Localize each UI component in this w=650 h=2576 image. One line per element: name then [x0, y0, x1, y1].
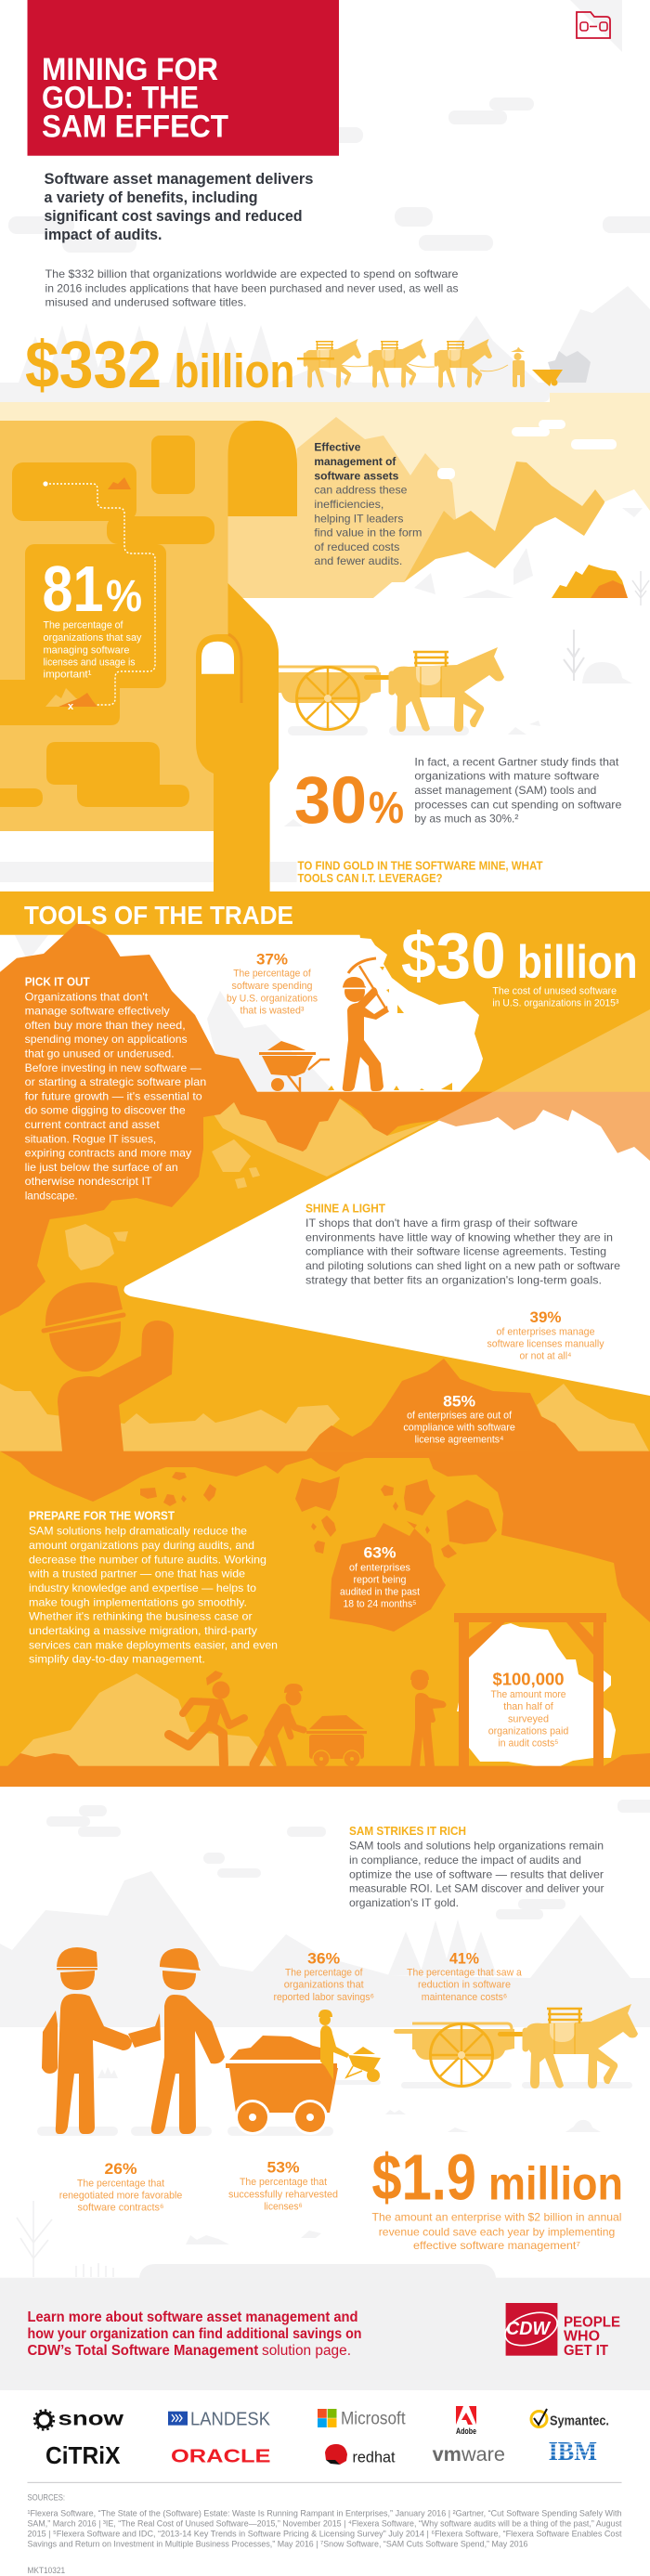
logo: Adobe — [456, 2406, 476, 2436]
text: Gartner study: by as much as 30%.² — [414, 813, 518, 826]
logo: Microsoft — [318, 2409, 406, 2429]
text: SAM strikes it rich: SAM tools and solutions help organizations remain — [349, 1840, 604, 1853]
text: pick it out: often buy more than they need, — [25, 1019, 186, 1032]
icon: standing miner — [410, 1670, 446, 1766]
$332 billion figure: billion — [175, 345, 295, 397]
title block: GOLD: THE — [42, 81, 199, 116]
mine floor — [0, 1766, 650, 1787]
intro heading: significant cost savings and reduced — [45, 207, 303, 225]
stat: 30%: % — [369, 784, 404, 833]
stat: 63%: report being — [353, 1574, 407, 1585]
text: effective management: can address these — [314, 484, 408, 497]
stat: 37%: that is wasted³ — [240, 1005, 305, 1016]
logo: Citrix: CiTRiX — [46, 2441, 121, 2469]
stat: $1.9 million — [371, 2140, 623, 2252]
icon: mine cart full of gold — [226, 2036, 338, 2135]
logo: CDW: CDW — [506, 2319, 552, 2339]
stat: $100,000: in audit costs⁵ — [498, 1738, 559, 1750]
stat: 81%: licenses and usage is — [43, 657, 136, 668]
intro paragraph: misused and underused software titles. — [45, 295, 247, 308]
icon: mule and cart, right — [394, 2004, 638, 2088]
text: prepare for the worst: services can make deployments easier, and even — [29, 1638, 278, 1651]
text: pick it out: spending money on applications — [25, 1033, 188, 1046]
stat: 37%: software spending — [232, 981, 312, 992]
stat: 85%: 85% — [443, 1392, 475, 1410]
stat: 53%: successfully reharvested — [228, 2189, 338, 2200]
icon: mule train — [297, 339, 525, 388]
intro heading: Software asset management delivers — [45, 170, 314, 188]
stat: $100,000: $100,000 — [492, 1670, 565, 1688]
icon: large miner — [44, 1282, 174, 1451]
stat: 63%: 63% — [364, 1543, 396, 1561]
stat: $30 billion — [401, 919, 638, 1009]
stat: 37%: by U.S. organizations — [227, 993, 318, 1004]
stat: 81%: important¹ — [43, 669, 92, 680]
text: prepare for the worst: decrease the number of future audits. Working — [29, 1553, 266, 1566]
question heading — [297, 860, 543, 885]
intro heading — [45, 170, 314, 243]
icon: wheelbarrow of ore — [259, 1041, 330, 1091]
text: prepare for the worst: SAM solutions help dramatically reduce the — [29, 1525, 247, 1538]
stat: 81%: managing software — [43, 644, 130, 656]
icon: small miner with wheelbarrow — [318, 2010, 381, 2082]
sources: SOURCES: — [28, 2493, 65, 2504]
logo: VMware: vmware — [433, 2444, 505, 2465]
text: pick it out: for future growth — it's essential to — [25, 1089, 202, 1102]
text: effective management: management of — [314, 455, 396, 468]
stat: 81% — [43, 553, 142, 680]
stat: $30 billion: in U.S. organizations in 2015³ — [492, 998, 619, 1009]
text: prepare for the worst: amount organizations pay during audits, and — [29, 1539, 254, 1552]
heading: tools of the trade: TOOLS OF THE TRADE — [24, 901, 293, 930]
logo: Red Hat: redhat — [353, 2449, 396, 2466]
text: effective management: find value in the form — [314, 527, 422, 540]
text: prepare for the worst: Whether it's rethinking the business case or — [29, 1610, 253, 1623]
panel: gold mine map — [0, 421, 297, 893]
text: Gartner study — [414, 755, 622, 826]
intro heading: a variety of benefits, including — [45, 189, 258, 206]
stat: 26%: 26% — [104, 2160, 137, 2178]
stat: 26%: software contracts⁶ — [78, 2203, 163, 2214]
icon: running miner — [169, 1671, 244, 1764]
title block — [28, 0, 339, 156]
text: Gartner study: asset management (SAM) tools and — [414, 784, 596, 797]
stat: $1.9 million: revenue could save each year by implementing — [379, 2225, 615, 2238]
text: prepare for the worst — [28, 1509, 278, 1666]
logo: Oracle: ORACLE — [171, 2447, 271, 2467]
text: Gartner study: In fact, a recent Gartner study finds that — [414, 755, 619, 768]
text: pick it out: that go unused or underused. — [25, 1047, 175, 1060]
stat: 36%: reported labor savings⁶ — [273, 1992, 374, 2003]
stat: 85%: of enterprises are out of — [407, 1411, 513, 1422]
text: pick it out: Organizations that don't — [25, 990, 149, 1003]
stat: 63%: of enterprises — [349, 1562, 410, 1573]
text: shine a light: environments have little way of knowing whether they are in — [306, 1230, 613, 1243]
stat: $100,000: surveyed — [508, 1713, 549, 1724]
stat: $100,000 — [488, 1670, 568, 1750]
stat: 39%: 39% — [529, 1308, 561, 1326]
text: pick it out: current contract and asset — [25, 1118, 160, 1131]
sources: ¹Flexera Software, “The State of the (Software) Estate: Waste Is Running Rampant in Enterprises,” January 2016 | ²Gartner, “Cut Software Spending Safely With — [28, 2508, 622, 2518]
logo: IBM: IBM — [549, 2437, 597, 2466]
text: Gartner study: organizations with mature software — [414, 770, 600, 783]
stat: 85%: license agreements⁴ — [415, 1435, 504, 1446]
question heading: TO FIND GOLD IN THE SOFTWARE MINE, WHAT — [297, 860, 543, 873]
gray band right of shaft — [270, 862, 297, 882]
stat: 85%: compliance with software — [403, 1423, 515, 1434]
text: effective management: and fewer audits. — [314, 554, 402, 567]
stat: 63%: 18 to 24 months⁵ — [344, 1598, 416, 1609]
text: shine a light: compliance with their software license agreements. Testing — [306, 1245, 606, 1258]
stat: 41%: 41% — [449, 1949, 479, 1967]
stat: $1.9 million: The amount an enterprise with $2 billion in annual — [371, 2211, 622, 2224]
text: SAM strikes it rich: measurable ROI. Let SAM discover and deliver your — [349, 1882, 604, 1895]
stat: 63%: audited in the past — [340, 1586, 420, 1597]
text: effective management: helping IT leaders — [314, 512, 403, 525]
intro paragraph: The $332 billion that organizations worldwide are expected to spend on software — [45, 267, 459, 280]
sources — [28, 2493, 622, 2575]
text: Gartner study: processes can cut spending on software — [414, 798, 622, 811]
stat: 36%: The percentage of — [285, 1968, 363, 1979]
panel: footer call to action: CDW’s Total Software Management — [28, 2343, 258, 2359]
text: shine a light — [306, 1202, 620, 1286]
stat: 81%: organizations that say — [43, 632, 142, 644]
text: prepare for the worst: undertaking a massive migration, third-party — [29, 1624, 257, 1637]
mine shaft — [196, 583, 279, 893]
logo: CDW: GET IT — [564, 2343, 608, 2359]
stat: 37% — [227, 950, 318, 1016]
text: shine a light: strategy that better fits an organization's long-term goals. — [306, 1273, 602, 1286]
gold nuggets — [328, 967, 452, 1090]
stat: 81%: 81 — [43, 553, 104, 625]
question heading: TOOLS CAN I.T. LEVERAGE? — [297, 872, 442, 885]
stat: 39% — [487, 1308, 604, 1361]
text: pick it out: landscape. — [25, 1189, 78, 1202]
text: pick it out: or starting a strategic software plan — [25, 1075, 206, 1088]
stat: 41%: maintenance costs⁶ — [422, 1992, 507, 2003]
panel: footer call to action: solution page. — [262, 2343, 351, 2359]
text: pick it out: lie just below the surface of an — [25, 1161, 178, 1174]
text: effective management: of reduced costs — [314, 540, 399, 553]
panel: gold mine map: x — [68, 701, 74, 712]
text: pick it out: otherwise nondescript IT — [25, 1175, 152, 1188]
logo: Adobe: Adobe — [456, 2426, 476, 2436]
text: effective management: inefficiencies, — [314, 498, 384, 511]
bare trees near footer — [17, 2201, 113, 2277]
sources: MKT10321 — [28, 2566, 65, 2575]
text: pick it out: PICK IT OUT — [25, 975, 90, 989]
stat: 63% — [340, 1543, 420, 1609]
panel: footer call to action — [0, 2264, 650, 2390]
stat: 53%: licenses⁶ — [264, 2201, 303, 2212]
text: pick it out: situation. Rogue IT issues, — [25, 1132, 156, 1145]
intro paragraph: in 2016 includes applications that have been purchased and never used, as well as — [45, 281, 459, 294]
stat: $100,000: The amount more — [490, 1689, 566, 1700]
stat: 81%: % — [106, 572, 142, 621]
logo: LANDESK: LANDESK — [190, 2410, 271, 2430]
stat: 30% — [284, 764, 404, 838]
intro paragraph — [45, 267, 459, 308]
panel: footer call to action: Learn more about software asset management and — [28, 2309, 358, 2325]
gray band behind tunnel — [0, 862, 214, 882]
icon: miner with pickaxe — [343, 958, 388, 1091]
text: SAM strikes it rich — [349, 1824, 604, 1909]
sources: SAM,” March 2016 | ³IE, “The Real Cost of Unused Software—2015,” November 2015 | ⁴Flexera Software, “Why software audits will be a thing of the past,” August — [28, 2518, 622, 2529]
logo: CDW: PEOPLE — [564, 2314, 620, 2330]
icon: wheelbarrow and ore cart — [532, 351, 591, 386]
stat: 26%: renegotiated more favorable — [59, 2190, 182, 2201]
stat: 81%: The percentage of — [43, 620, 124, 631]
logo: Symantec — [531, 2409, 609, 2429]
hills at the mine floor — [7, 1673, 650, 1766]
stat: 41%: reduction in software — [418, 1980, 511, 1991]
icon: two miners shaking hands — [42, 1947, 225, 2134]
text: effective management — [314, 441, 422, 567]
stat: 53% — [228, 2158, 338, 2212]
stat: 30%: 30 — [294, 764, 367, 838]
stat: $30 billion: The cost of unused software — [492, 986, 617, 997]
stat: $30 billion: $30 — [401, 919, 506, 992]
text: shine a light: and piloting solutions can shed light on a new path or software — [306, 1259, 620, 1272]
intro heading: impact of audits. — [45, 226, 162, 243]
text: shine a light: IT shops that don't have a firm grasp of their software — [306, 1216, 578, 1229]
logo: Microsoft: Microsoft — [341, 2410, 406, 2429]
logo: snow — [34, 2409, 124, 2430]
logo: Symantec: Symantec. — [550, 2413, 609, 2429]
stat: 53%: 53% — [267, 2158, 299, 2176]
stat: 39%: of enterprises manage — [496, 1326, 594, 1337]
text: prepare for the worst: industry knowledge and expertise — helps to — [29, 1581, 256, 1594]
logo: snow: snow — [58, 2409, 124, 2430]
stat: 41% — [407, 1949, 523, 2003]
text: prepare for the worst: with a trusted partner — one that has wide — [28, 1568, 245, 1581]
stat: 39%: or not at all⁴ — [520, 1350, 572, 1361]
sources: 2015 | ⁵Flexera Software and IDC, “2013-14 Key Trends in Software Pricing & Licensing Survey” July 2014 | ⁶Flexera Software, “Flexera Software Enables Cost — [28, 2529, 622, 2539]
icon: miner pushing cart — [254, 1684, 367, 1767]
sources: Savings and Return on Investment in Multiple Business Processes,” May 2016 | ⁷Snow Software, “SAM Cuts Software Spend,” May 2016 — [28, 2539, 527, 2549]
divider — [28, 2482, 622, 2483]
mine entrance — [454, 1613, 616, 1767]
background: top clouds and mountains — [8, 0, 650, 393]
stat: 39%: software licenses manually — [487, 1338, 604, 1349]
cream sky and mountain backdrop — [0, 383, 650, 598]
stat: 41%: The percentage that saw a — [407, 1968, 523, 1979]
stat: 37%: The percentage of — [233, 969, 312, 980]
text: effective management: software assets — [314, 469, 399, 482]
stat: $100,000: than half of — [503, 1701, 554, 1712]
stat: $1.9 million: million — [488, 2157, 623, 2209]
text: SAM strikes it rich: SAM STRIKES IT RICH — [349, 1824, 466, 1838]
stat: 26% — [59, 2160, 182, 2214]
icon: folder logo — [577, 12, 610, 38]
gold pile and bare tree — [552, 565, 649, 605]
title block: MINING FOR — [42, 52, 218, 87]
text: effective management: Effective — [314, 441, 361, 454]
panel: footer call to action: how your organization can find additional savings on — [28, 2326, 362, 2342]
stat: $1.9 million: effective software management⁷ — [413, 2239, 580, 2252]
logo: CDW: WHO — [564, 2329, 600, 2345]
text: shine a light: SHINE A LIGHT — [306, 1202, 385, 1216]
icon: mule and cart — [279, 630, 632, 735]
stat: 53%: The percentage that — [240, 2177, 327, 2188]
treasure trail — [46, 484, 155, 705]
stat: 37%: 37% — [256, 950, 288, 968]
text: prepare for the worst: simplify day-to-day management. — [29, 1653, 205, 1666]
logo: CDW — [500, 2303, 620, 2359]
text: pick it out: do some digging to discover the — [25, 1104, 186, 1117]
logo: Red Hat — [325, 2444, 396, 2466]
stat: $1.9 million: $1.9 — [371, 2140, 476, 2213]
title block: SAM EFFECT — [42, 110, 228, 145]
stat: 26%: The percentage that — [77, 2178, 164, 2189]
text: SAM strikes it rich: in compliance, reduce the impact of audits and — [349, 1854, 581, 1867]
stat: 36% — [273, 1949, 374, 2003]
text: pick it out: Before investing in new software — — [25, 1061, 202, 1074]
text: prepare for the worst: PREPARE FOR THE WORST — [29, 1509, 175, 1523]
text: SAM strikes it rich: optimize the use of software — results that deliver — [349, 1867, 604, 1880]
stat: 85% — [403, 1392, 515, 1446]
text: SAM strikes it rich: organization's IT gold. — [349, 1896, 459, 1909]
panel: tools of the trade background — [0, 891, 650, 1766]
$332 billion figure: $332 — [25, 329, 162, 402]
stat: $30 billion: billion — [517, 936, 638, 988]
stat: 36%: 36% — [307, 1949, 340, 1967]
text: pick it out: manage software effectively — [25, 1005, 170, 1018]
text: pick it out — [25, 975, 206, 1202]
stat: $100,000: organizations paid — [488, 1726, 568, 1737]
underground mountains and floor — [0, 1359, 650, 1632]
stat: 36%: organizations that — [284, 1980, 364, 1991]
text: pick it out: expiring contracts and more may — [25, 1147, 191, 1160]
text: prepare for the worst: make tough implementations go smoothly. — [29, 1595, 247, 1608]
$332 billion figure — [25, 329, 295, 402]
background: lower clouds and mountains — [0, 1800, 650, 2244]
